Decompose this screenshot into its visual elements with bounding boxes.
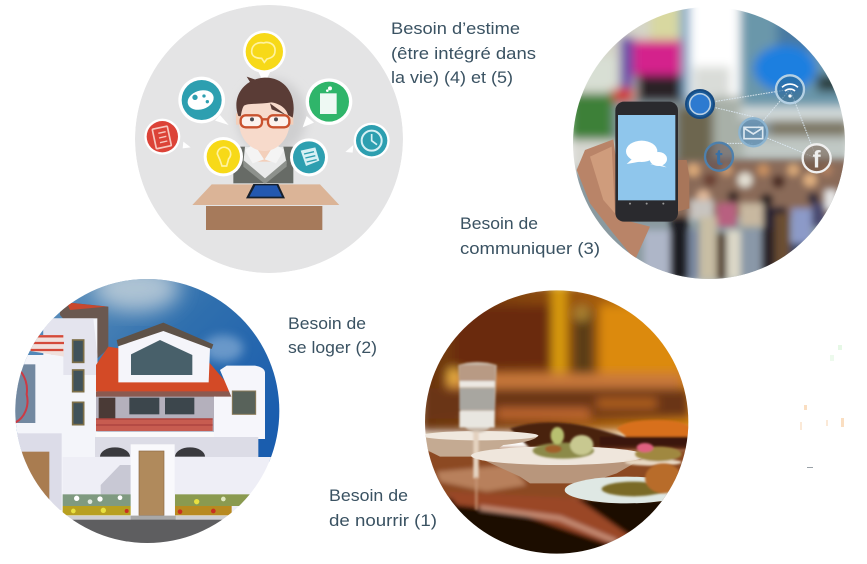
pavement and road [67,516,228,543]
table [420,448,700,564]
text: food need label: de nourrir (1) [329,511,437,530]
sky [15,279,280,462]
blurred city background [570,0,850,280]
character: shoulders and shirt [233,142,293,184]
blurred crowd [643,160,850,280]
text: esteem need label: Besoin d’estime [391,19,520,38]
dormer gable [117,323,213,382]
text: housing need label: Besoin de [288,314,366,333]
text: food need label: Besoin de [329,486,408,505]
text: communication need label: communiquer (3) [460,239,600,258]
balcony floor [96,392,233,437]
icon: mail node [739,118,767,146]
icon: f node: f [813,147,822,174]
tower left [10,302,108,515]
text: esteem need label [391,19,536,87]
character: glasses [241,115,289,127]
chair back [510,420,690,450]
icon: t node: t [715,145,723,170]
icon: green jar bubble [303,78,352,127]
icon: t node [705,143,733,171]
faint stray specks at right edge [800,345,844,468]
right wing [214,366,265,439]
tower windows [73,340,84,425]
icon: wifi node [776,75,804,103]
text: communication need label: Besoin de [460,214,538,233]
text: food need label [329,486,437,530]
icon: clock bubble [345,123,390,159]
text: housing need label: se loger (2) [288,338,377,357]
blurred restaurant background [420,285,700,432]
desk [192,184,339,230]
front right plate with food [565,463,689,503]
panel: housing need illustration [15,279,280,543]
flower beds [63,494,252,515]
icon: light bulb bubble [204,137,243,176]
network lines [714,90,815,158]
wine glass [458,362,497,510]
icon: books bubble [290,138,328,176]
soft shadow behind head [237,78,307,155]
icon: palette bubble [178,77,229,125]
text: esteem need label: la vie) (4) et (5) [391,68,513,87]
main salad plate [471,446,646,483]
boundary wall [95,457,271,515]
icon: brain bubble [243,30,286,78]
gate with door [131,444,175,516]
ground floor arches [95,437,258,458]
circle background [135,5,403,273]
smartphone [615,102,678,222]
icon: blue circle node [686,90,714,118]
hand holding phone [577,139,689,260]
panel: food need photo [420,285,700,564]
panel: communication need photo [570,0,850,280]
icon: chat bubbles [626,141,667,167]
red tile roof [96,347,234,392]
back left plate [422,431,538,457]
character: head and hair [236,77,294,151]
text: housing need label [288,314,377,357]
text: esteem need label: (être intégré dans [391,44,536,63]
salad [533,427,594,459]
right back plate [625,443,682,466]
text: communication need label [460,214,600,258]
tablet [246,184,285,198]
icon: clipboard bubble [144,119,191,155]
panel: esteem need illustration [135,5,403,273]
icon: f node [803,144,831,174]
